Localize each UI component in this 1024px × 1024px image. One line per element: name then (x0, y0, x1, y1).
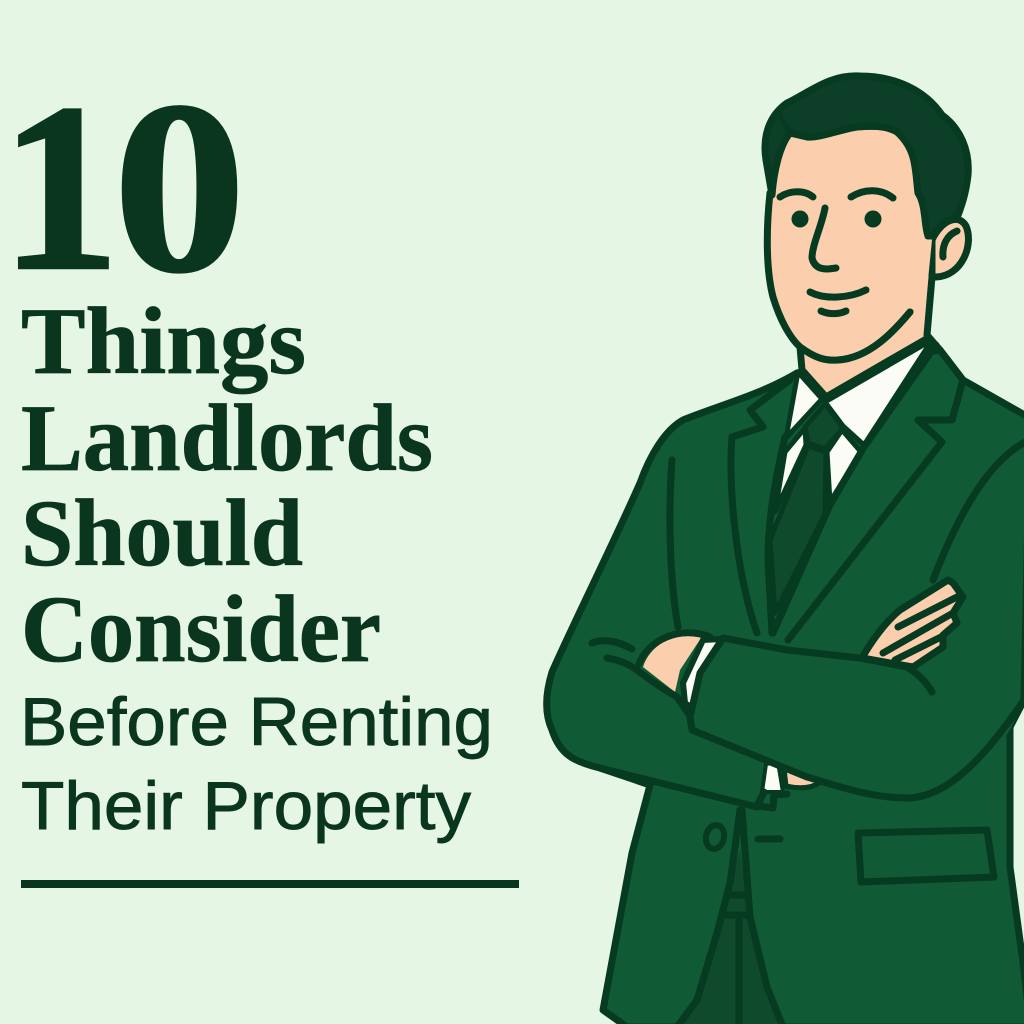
hair (765, 76, 968, 236)
button (704, 823, 726, 851)
left sleeve lower edge (600, 768, 757, 807)
left arm sleeve creases (592, 641, 690, 716)
breast pocket (858, 830, 994, 882)
jacket body (547, 350, 1024, 1024)
neck (800, 270, 934, 396)
mouth (810, 290, 866, 314)
left hand (639, 633, 710, 692)
title line: Consider: Consider (21, 576, 381, 682)
illustration: landlord in green suit (547, 76, 1024, 1024)
subtitle line: Before Renting: Before Renting (20, 684, 493, 760)
title number 10: 0 (113, 52, 246, 324)
left shirt cuff (683, 639, 722, 708)
shirt tail and lower hand (757, 762, 820, 808)
lapels (731, 345, 963, 640)
title line: Should: Should (21, 480, 303, 586)
ear (932, 219, 968, 277)
jacket fold lines (670, 441, 1024, 627)
forearm outline (690, 638, 1024, 798)
title line: Things: Things (21, 288, 306, 394)
right hand with fingers (862, 580, 963, 667)
title line: Landlords: Landlords (21, 385, 433, 491)
subtitle line: Their Property: Their Property (21, 768, 471, 844)
eyes (792, 210, 882, 228)
forearm (690, 638, 1024, 798)
title number 10: 1 (0, 54, 120, 320)
face outline (767, 193, 910, 360)
eyebrows (780, 191, 893, 198)
nose (812, 208, 836, 269)
collar neck line (800, 277, 940, 397)
tie (770, 404, 843, 613)
title number 10 (0, 52, 246, 324)
shirt and collar (775, 340, 932, 512)
trousers (677, 810, 783, 1024)
title block (0, 52, 493, 844)
face (767, 127, 932, 360)
buttonhole (758, 836, 780, 842)
jaw line (838, 312, 910, 360)
underline rule (21, 880, 519, 888)
